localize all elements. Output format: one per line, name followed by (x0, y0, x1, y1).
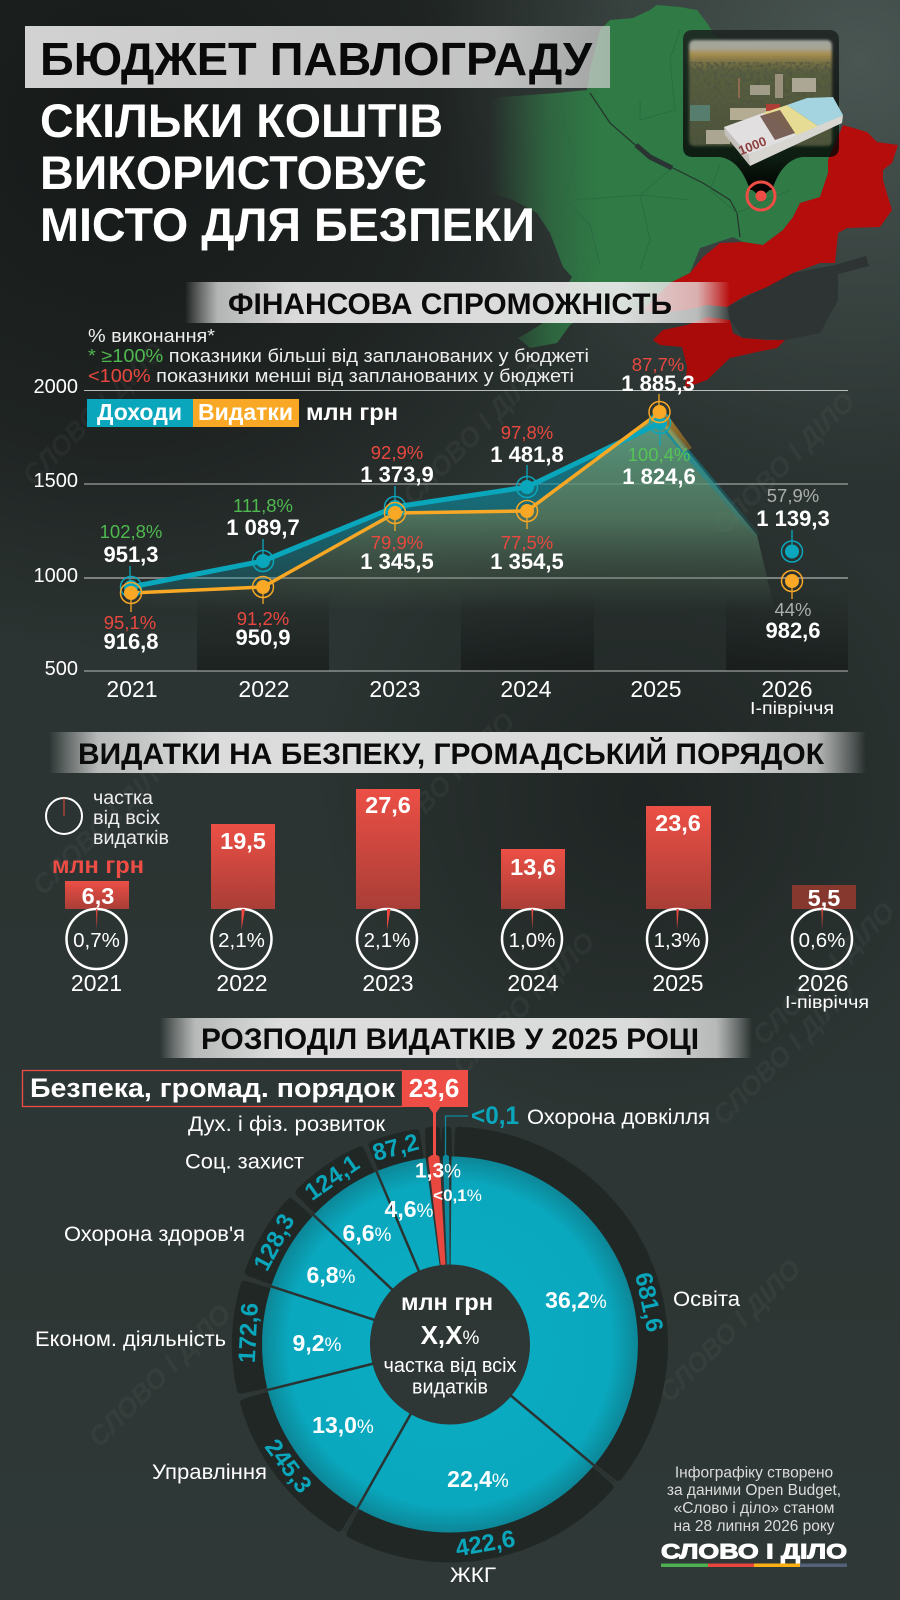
bar 2022 (211, 824, 275, 909)
sector percentages: 9,2% (293, 1330, 342, 1356)
watermarks: СЛОВО І ДІЛО (653, 1254, 807, 1408)
sector: culture and sport (376, 1158, 440, 1271)
revenue markers (120, 412, 802, 598)
callout: security spending: 23,6 (409, 1073, 459, 1103)
map: river Dnipro and oblast borders (560, 30, 790, 270)
ring values: 172,6 (234, 1302, 264, 1364)
city photo (689, 40, 832, 146)
callout: environment (446, 1102, 519, 1156)
sector: security (428, 1155, 446, 1265)
banknote stack: 1000 (736, 133, 769, 158)
credits (667, 1464, 841, 1535)
sector: social protection (314, 1171, 419, 1289)
category labels: Управління (152, 1461, 267, 1484)
map pin with city photo and banknotes (683, 30, 843, 210)
category labels: Дух. і фіз. розвиток (188, 1113, 386, 1136)
map: Azov sea and neighbouring land (727, 256, 869, 340)
watermarks: СЛОВО І ДІЛО (447, 927, 601, 1081)
watermarks: СЛОВО І ДІЛО (83, 1299, 237, 1453)
legend: share of all expenses: видатків (93, 828, 169, 849)
bar 2022: 19,5 (220, 828, 266, 854)
sector: housing and utilities (357, 1396, 594, 1532)
values and percentages: 92,9% (371, 442, 423, 463)
pin panel (683, 30, 839, 190)
ring values (234, 1129, 668, 1562)
sector percentages: 13,0% (312, 1412, 374, 1438)
chart legend: revenue, expenses (87, 399, 398, 427)
sector percentages: <0,1% (433, 1186, 482, 1205)
values and percentages: 1 481,8 (490, 442, 564, 467)
values and percentages: 1 139,3 (756, 506, 830, 531)
bar 2026: 5,5 (808, 885, 840, 911)
credits: «Слово і діло» станом (674, 1500, 834, 1517)
share circles: 0,7% (73, 929, 120, 952)
bar year labels: 2022 (216, 970, 268, 996)
donut chart: 2025 expenses (234, 1129, 668, 1562)
watermarks: СЛОВО І ДІЛО (367, 707, 521, 861)
bar 2025: 23,6 (655, 810, 701, 836)
expense markers (120, 402, 802, 604)
sector: administration (268, 1364, 411, 1508)
pin stems (130, 394, 792, 612)
category labels: Соц. захист (185, 1150, 304, 1174)
category labels (35, 1106, 740, 1587)
line chart: revenue and expenses (34, 354, 848, 718)
sector percentages (293, 1160, 607, 1492)
share circles: 2,1% (364, 929, 410, 952)
title line 2: СКІЛЬКИ КОШТІВ (40, 94, 443, 147)
category labels: Охорона здоров'я (64, 1223, 245, 1246)
year labels: 2024 (500, 676, 552, 702)
values and percentages: 1 373,9 (360, 462, 434, 487)
chart axis: 2000 (34, 376, 78, 398)
title band (25, 26, 610, 88)
heading: financial capacity (185, 282, 730, 323)
chart column shading (197, 590, 848, 671)
values and percentages: 87,7% (632, 354, 684, 375)
map: red occupied territory (643, 125, 898, 313)
sector percentages: 1,3% (415, 1160, 461, 1182)
watermarks: СЛОВО І ДІЛО (707, 387, 861, 541)
category labels: Економ. діяльність (35, 1328, 226, 1351)
legend note: percent of completion (88, 326, 589, 386)
values and percentages: 44% (774, 599, 812, 620)
values and percentages: 57,9% (767, 485, 819, 506)
category labels: Охорона довкілля (527, 1106, 710, 1129)
bar year labels: 2025 (652, 970, 704, 996)
watermarks: СЛОВО І ДІЛО (27, 747, 181, 901)
expense line (131, 412, 660, 593)
sector percentages: 4,6% (385, 1196, 434, 1222)
values and percentages: 1 354,5 (490, 549, 564, 574)
title line 4: МІСТО ДЛЯ БЕЗПЕКИ (40, 198, 535, 251)
bar year labels: 2021 (71, 970, 122, 996)
values and percentages: 102,8% (100, 521, 162, 542)
logo: Slovo i Dilo (661, 1540, 847, 1567)
outer value ring (236, 1130, 664, 1559)
watermarks (17, 337, 900, 1453)
bar 2024: 13,6 (510, 854, 556, 880)
heading: 2025 expense distribution: РОЗПОДІЛ ВИДАТКІВ У 2025 РОЦІ (201, 1023, 699, 1056)
sector: environment (443, 1155, 450, 1265)
sector percentages: 36,2% (545, 1287, 607, 1313)
year labels: І-півріччя (750, 698, 834, 718)
year labels: 2026 (761, 676, 813, 702)
values and percentages: 77,5% (501, 532, 553, 553)
year labels: 2023 (369, 676, 421, 702)
values and percentages: 91,2% (237, 608, 289, 629)
values and percentages: 950,9 (235, 625, 291, 650)
share circles: 2,1% (218, 929, 265, 952)
values and percentages: 1 089,7 (226, 515, 300, 540)
bar year labels: 2023 (362, 970, 414, 996)
bar 2025 (646, 806, 711, 909)
values and percentages: 1 345,5 (360, 549, 434, 574)
chart axis: 1500 (34, 470, 78, 492)
logo: Slovo i Dilo: СЛОВО І ДІЛО (661, 1540, 847, 1564)
bar 2023: 27,6 (365, 792, 411, 818)
title line 3: ВИКОРИСТОВУЄ (40, 146, 427, 199)
ring values: 245,3 (259, 1434, 317, 1498)
year labels (106, 676, 834, 718)
credits: за даними Open Budget, (667, 1482, 841, 1499)
bar chart: security spending (65, 789, 869, 1012)
bar 2021 (65, 881, 129, 909)
chart legend: revenue, expenses: Видатки (198, 399, 293, 425)
category labels: ЖКГ (450, 1564, 496, 1587)
values and percentages (100, 354, 830, 654)
ring values: 87,2 (370, 1129, 422, 1167)
bar 2024 (501, 849, 565, 909)
map of Ukraine region (470, 5, 898, 388)
banknote stack (724, 97, 843, 166)
credits: Інфографіку створено (675, 1464, 833, 1482)
map: Crimea (653, 317, 785, 388)
legend note: percent of completion: * ≥100% показники більші від запланованих у бюджеті (88, 346, 589, 366)
bar year labels: І-півріччя (785, 992, 869, 1012)
callout: environment: <0,1 (471, 1102, 519, 1130)
sector: healthcare (271, 1215, 392, 1320)
share circles (66, 909, 852, 969)
values and percentages: 982,6 (765, 618, 821, 643)
heading: financial capacity: ФІНАНСОВА СПРОМОЖНІСТЬ (228, 288, 672, 321)
heading: security spending: ВИДАТКИ НА БЕЗПЕКУ, ГРОМАДСЬКИЙ ПОРЯДОК (78, 737, 825, 771)
sector percentages: 6,6% (343, 1220, 392, 1246)
category labels: Освіта (673, 1288, 740, 1311)
chart axis: 500 (45, 658, 78, 680)
sector percentages: 22,4% (447, 1466, 509, 1492)
donut centre: частка від всіх (384, 1355, 516, 1377)
donut centre: млн грн (401, 1289, 493, 1315)
unit label: mln uah: млн грн (52, 852, 144, 878)
bar 2021: 6,3 (82, 883, 114, 909)
title line 1: БЮДЖЕТ ПАВЛОГРАДУ (40, 33, 593, 85)
bar year labels: 2026 (797, 970, 849, 996)
sector separators (264, 1168, 614, 1531)
values and percentages: 100,4% (628, 444, 690, 465)
ring values: 128,3 (248, 1210, 300, 1275)
map: green controlled territory (470, 5, 840, 348)
values and percentages: 79,9% (371, 532, 423, 553)
callout: security spending: Безпека, громад. порядок (30, 1073, 396, 1103)
values and percentages: 111,8% (233, 495, 293, 516)
legend: share of all expenses: від всіх (93, 808, 161, 829)
share circles: 1,0% (509, 929, 555, 952)
area under expense line (131, 412, 775, 612)
watermarks: СЛОВО І ДІЛО (17, 337, 171, 491)
falling wedge: revenue (664, 425, 760, 537)
values and percentages: 916,8 (103, 629, 159, 654)
sector: education (451, 1156, 638, 1465)
falling wedge: expense (662, 410, 692, 452)
values and percentages: 95,1% (104, 612, 156, 633)
values and percentages: 951,3 (103, 542, 159, 567)
year labels: 2021 (106, 676, 158, 702)
band between revenue and expense lines (131, 442, 620, 593)
year labels: 2022 (238, 676, 290, 702)
sector: economic activity (262, 1286, 374, 1390)
values and percentages: 1 824,6 (622, 464, 696, 489)
watermarks: СЛОВО І ДІЛО (707, 977, 861, 1131)
bar year labels (71, 970, 869, 1012)
legend note: percent of completion: % виконання* (88, 326, 215, 346)
location marker (747, 182, 775, 210)
ring values: 422,6 (453, 1525, 517, 1562)
watermarks: СЛОВО І ДІЛО (397, 357, 551, 511)
values and percentages: 97,8% (501, 422, 553, 443)
chart axis: 1000 (34, 565, 78, 587)
bar 2023 (356, 789, 420, 909)
bar year labels: 2024 (507, 970, 559, 996)
main title (25, 26, 610, 251)
share circles: 0,6% (799, 929, 845, 952)
chart legend: revenue, expenses: Доходи (97, 399, 182, 425)
donut centre: Х,Х% (421, 1320, 480, 1350)
heading: 2025 expense distribution (160, 1018, 752, 1058)
revenue line (131, 423, 660, 587)
callout: security spending (22, 1070, 468, 1157)
legend: share of all expenses: частка (93, 788, 153, 809)
sector percentages: 6,8% (307, 1262, 356, 1288)
credits: на 28 липня 2026 року (673, 1518, 835, 1535)
ring values: 124,1 (300, 1150, 365, 1206)
legend: share of all expenses (46, 788, 169, 849)
watermarks: СЛОВО І ДІЛО (747, 897, 900, 1051)
donut centre (384, 1289, 516, 1398)
values and percentages: 1 885,3 (621, 371, 695, 396)
donut centre: видатків (412, 1376, 488, 1398)
ring values: 681,6 (629, 1270, 668, 1334)
year labels: 2025 (630, 676, 682, 702)
share circles: 1,3% (654, 929, 700, 952)
bar 2026 (792, 885, 856, 911)
legend note: percent of completion: <100% показники менші від запланованих у бюджеті (88, 366, 574, 386)
chart legend: revenue, expenses: млн грн (306, 399, 398, 425)
chart axis (34, 376, 848, 680)
